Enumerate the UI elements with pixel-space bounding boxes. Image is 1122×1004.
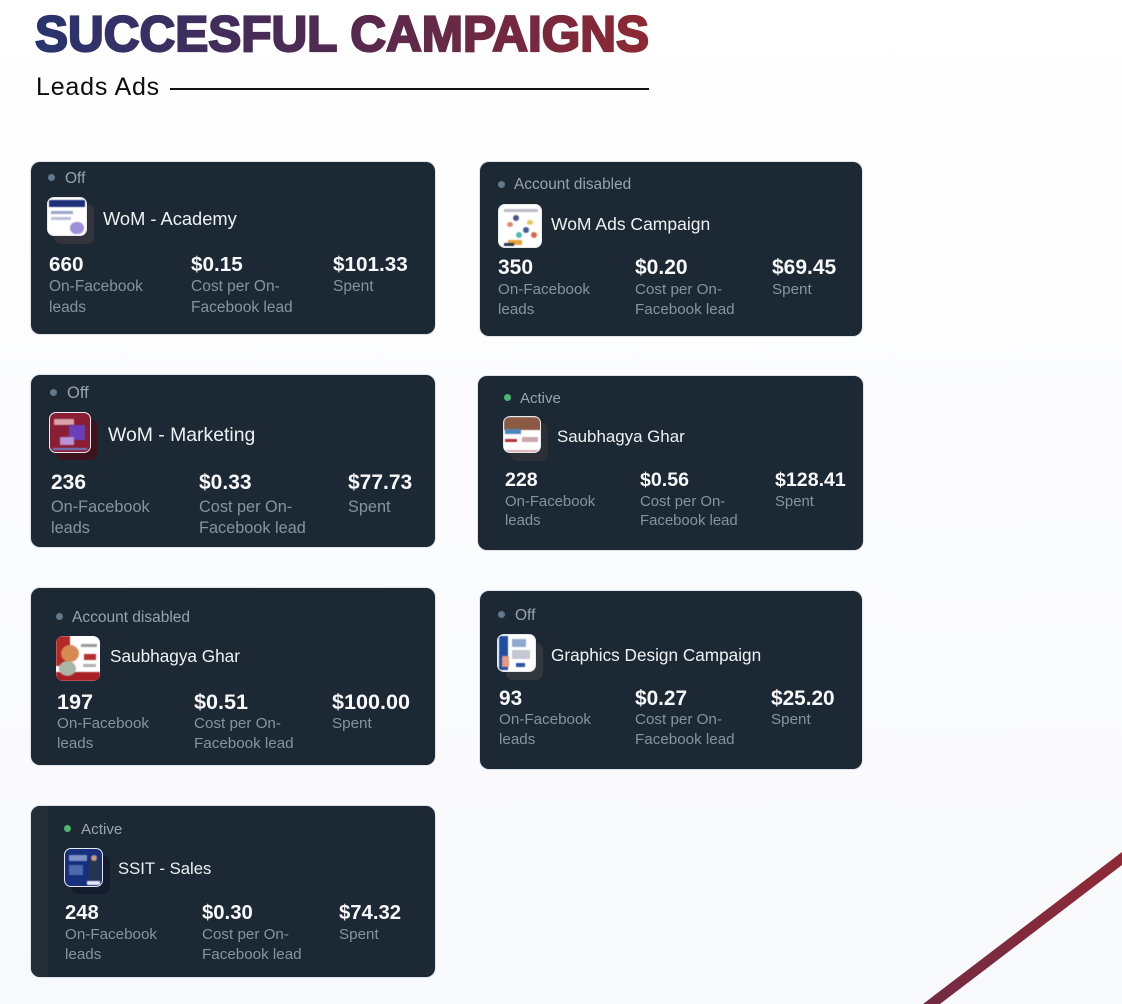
metric: cost per lead: $0.27 bbox=[635, 687, 687, 710]
metric: leads: On-Facebook bbox=[49, 278, 143, 295]
metric: spent bbox=[333, 253, 408, 295]
icon: ad thumbnail bbox=[64, 848, 110, 894]
campaign name: SSIT - Sales bbox=[118, 859, 211, 878]
metric: leads: On-Facebook bbox=[51, 498, 150, 516]
subtitle: Leads Ads: Leads Ads bbox=[36, 73, 160, 101]
metric: cost per lead: Facebook lead bbox=[194, 735, 294, 752]
status: Off: Off bbox=[65, 170, 85, 187]
metric: leads: leads bbox=[57, 735, 93, 752]
metric: cost per lead: $0.51 bbox=[194, 689, 248, 714]
metric: leads bbox=[57, 689, 149, 752]
panel: WoM - Academy bbox=[31, 162, 435, 334]
metric: spent: Spent bbox=[333, 278, 374, 295]
metric: cost per lead: Facebook lead bbox=[635, 731, 735, 748]
icon: ad thumbnail bbox=[49, 412, 97, 460]
metric: spent: Spent bbox=[775, 494, 814, 510]
metric: spent: Spent bbox=[339, 926, 379, 943]
metric: cost per lead bbox=[199, 471, 306, 537]
metric: leads: leads bbox=[498, 301, 534, 318]
subtitle rule bbox=[170, 88, 649, 90]
metric: spent: $128.41 bbox=[775, 469, 846, 491]
metric: cost per lead: Facebook lead bbox=[202, 946, 302, 963]
metric: spent: Spent bbox=[772, 281, 812, 298]
metric: leads: 248 bbox=[65, 902, 99, 924]
status dot bbox=[64, 825, 71, 832]
campaign name: WoM - Marketing bbox=[108, 424, 255, 446]
status dot bbox=[48, 174, 55, 181]
campaign name: Saubhagya Ghar bbox=[557, 427, 685, 446]
metric: leads: leads bbox=[49, 299, 86, 316]
metric: cost per lead bbox=[194, 689, 294, 752]
metric: spent: Spent bbox=[332, 715, 372, 732]
metric: cost per lead bbox=[202, 902, 302, 963]
icon: ad thumbnail bbox=[47, 197, 94, 244]
metric: leads bbox=[49, 253, 143, 316]
metric: cost per lead: Cost per On- bbox=[202, 926, 289, 943]
metric: leads: 93 bbox=[499, 687, 522, 710]
metric: spent bbox=[339, 902, 401, 943]
panel: WoM - Marketing bbox=[31, 375, 435, 547]
metric: leads: leads bbox=[499, 731, 535, 748]
panel: SSIT - Sales bbox=[31, 806, 435, 977]
metric: cost per lead: $0.20 bbox=[635, 256, 688, 279]
status: Off: Off bbox=[515, 607, 535, 624]
metric: leads bbox=[505, 469, 596, 529]
metric: leads: leads bbox=[51, 519, 90, 537]
metric: leads: On-Facebook bbox=[65, 926, 157, 943]
metric: spent: $77.73 bbox=[348, 471, 412, 494]
metric: cost per lead bbox=[640, 469, 738, 529]
panel: Saubhagya Ghar (Account disabled) bbox=[31, 588, 435, 765]
metric: leads: leads bbox=[505, 513, 541, 529]
metric: leads bbox=[499, 687, 591, 748]
status: Off: Off bbox=[67, 384, 89, 402]
metric: spent: $100.00 bbox=[332, 689, 410, 714]
left edge strip bbox=[31, 806, 48, 977]
metric: leads bbox=[498, 256, 590, 318]
status dot bbox=[498, 181, 505, 188]
icon: ad thumbnail bbox=[497, 634, 543, 680]
status dot bbox=[504, 394, 511, 401]
metric: leads: 197 bbox=[57, 689, 93, 714]
metric: cost per lead: $0.15 bbox=[191, 253, 243, 276]
status: Account disabled: Account disabled bbox=[72, 609, 190, 626]
metric: cost per lead: Facebook lead bbox=[635, 301, 735, 318]
campaign name: Saubhagya Ghar bbox=[110, 646, 240, 666]
metric: leads: On-Facebook bbox=[505, 494, 595, 510]
metric: leads: On-Facebook bbox=[499, 711, 591, 728]
metric: leads: 228 bbox=[505, 469, 538, 491]
metric: spent bbox=[775, 469, 846, 510]
metric: cost per lead: Facebook lead bbox=[191, 299, 293, 316]
panel: Graphics Design Campaign bbox=[480, 591, 862, 769]
metric: spent bbox=[348, 471, 412, 516]
metric: cost per lead: Cost per On- bbox=[635, 711, 722, 728]
campaign name: WoM - Academy bbox=[103, 208, 237, 229]
status dot bbox=[50, 389, 57, 396]
panel: WoM Ads Campaign bbox=[480, 162, 862, 336]
metric: cost per lead: Facebook lead bbox=[640, 513, 738, 529]
panel: Saubhagya Ghar (Active) bbox=[478, 376, 863, 550]
metric: spent bbox=[772, 256, 836, 298]
metric: leads: 350 bbox=[498, 256, 533, 279]
metric: spent: Spent bbox=[348, 498, 391, 516]
metric: spent bbox=[332, 689, 410, 732]
campaign name: Graphics Design Campaign bbox=[551, 645, 761, 665]
metric: spent: $69.45 bbox=[772, 256, 836, 279]
metric: spent bbox=[771, 687, 835, 728]
metric: leads: leads bbox=[65, 946, 101, 963]
metric: leads: On-Facebook bbox=[498, 281, 590, 298]
metric: cost per lead bbox=[635, 687, 735, 748]
metric: cost per lead: $0.33 bbox=[199, 471, 252, 494]
status: Active: Active bbox=[81, 821, 122, 838]
metric: cost per lead: Cost per On- bbox=[194, 715, 281, 732]
metric: cost per lead: Cost per On- bbox=[635, 281, 722, 298]
icon: ad thumbnail bbox=[56, 636, 100, 681]
metric: cost per lead bbox=[635, 256, 735, 318]
icon: ad thumbnail bbox=[503, 416, 548, 461]
metric: cost per lead: Cost per On- bbox=[191, 278, 280, 295]
status dot bbox=[56, 613, 63, 620]
metric: leads bbox=[65, 902, 157, 963]
icon: ad thumbnail bbox=[498, 204, 542, 248]
metric: leads: On-Facebook bbox=[57, 715, 149, 732]
campaign name: WoM Ads Campaign bbox=[551, 214, 710, 234]
metric: cost per lead: Cost per On- bbox=[199, 498, 292, 516]
status dot bbox=[498, 611, 505, 618]
status: Active: Active bbox=[520, 390, 561, 407]
metric: cost per lead: $0.30 bbox=[202, 902, 253, 924]
metric: cost per lead: $0.56 bbox=[640, 469, 689, 491]
metric: leads: 660 bbox=[49, 253, 84, 276]
metric: spent: $101.33 bbox=[333, 253, 408, 276]
metric: spent: $25.20 bbox=[771, 687, 835, 710]
metric: cost per lead: Facebook lead bbox=[199, 519, 306, 537]
diagonal accent line bbox=[923, 852, 1122, 1004]
metric: cost per lead: Cost per On- bbox=[640, 494, 725, 510]
metric: spent: $74.32 bbox=[339, 902, 401, 924]
metric: leads: 236 bbox=[51, 471, 86, 494]
metric: spent: Spent bbox=[771, 711, 811, 728]
status: Account disabled: Account disabled bbox=[514, 176, 631, 193]
metric: leads bbox=[51, 471, 150, 537]
metric: cost per lead bbox=[191, 253, 293, 316]
